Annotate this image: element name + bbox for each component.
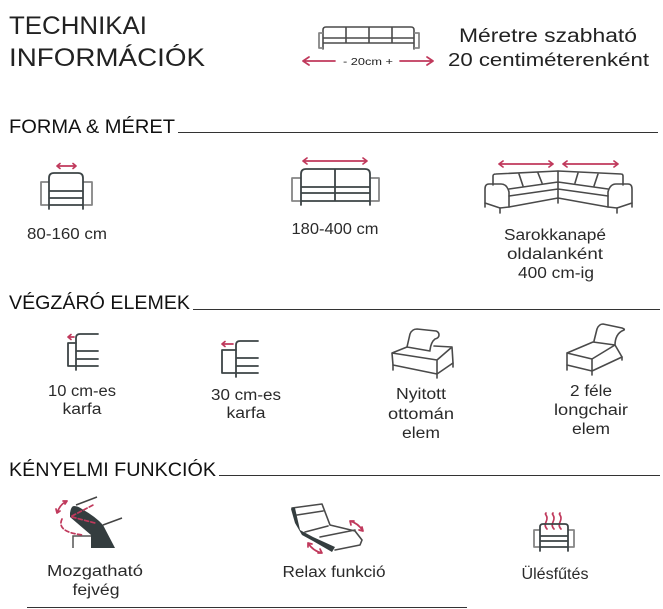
label: longchair: longchair — [554, 402, 628, 419]
title: TECHNIKAI — [9, 12, 147, 40]
label: adjustable headrest: Mozgatható — [47, 563, 143, 580]
label: corner sofa: 400 cm-ig — [518, 265, 594, 282]
heading: forma és méret: FORMA & MÉRET — [9, 117, 175, 138]
heading: végzáró elemek: VÉGZÁRÓ ELEMEK — [9, 292, 190, 314]
section: kényelmi funkciók — [9, 459, 660, 599]
heading: kényelmi funkciók: KÉNYELMI FUNKCIÓK — [9, 459, 216, 481]
label: heated seat: Ülésfűtés — [522, 565, 589, 583]
title — [9, 12, 205, 72]
label: longchair — [554, 383, 628, 438]
section: végzáró elemek — [9, 292, 660, 442]
icon: corner sofa — [485, 161, 632, 213]
label: adjustable headrest — [47, 563, 143, 599]
icon: longchair — [567, 324, 624, 375]
text: custom size note — [448, 26, 649, 70]
label: corner sofa: oldalanként — [507, 246, 604, 263]
label: armchair: 80-160 cm — [27, 226, 107, 243]
icon: heated seat — [534, 513, 574, 551]
text: custom size note: 20 centiméterenként — [448, 49, 649, 70]
icon: adjustable headrest — [56, 497, 122, 548]
icon: resizable sofa with 20 cm arrows: - 20cm + — [343, 56, 393, 68]
icon: 30 cm arm — [222, 341, 258, 377]
icon: open ottoman — [392, 329, 453, 378]
label: 30 cm arm: karfa — [226, 405, 266, 422]
label: 30 cm arm — [211, 387, 281, 422]
label: longchair: elem — [572, 421, 610, 438]
label: sofa: 180-400 cm — [292, 221, 378, 238]
label: open ottoman: Nyitott — [396, 386, 447, 403]
icon: armchair — [41, 164, 92, 209]
text: custom size note: Méretre szabható — [459, 26, 637, 47]
label: longchair: 2 féle — [570, 383, 612, 400]
label: 10 cm arm: 10 cm-es — [48, 383, 116, 400]
label: corner sofa — [504, 227, 606, 282]
label: open ottoman: elem — [402, 425, 440, 442]
icon: sofa — [292, 158, 379, 205]
label: relax function: Relax funkció — [282, 564, 386, 581]
icon: 10 cm arm — [68, 334, 98, 370]
icon: relax function — [291, 504, 363, 553]
label: 30 cm arm: 30 cm-es — [211, 387, 281, 404]
label: open ottoman — [388, 386, 454, 442]
label: 10 cm arm — [48, 383, 116, 418]
title: INFORMÁCIÓK — [9, 43, 205, 72]
section: forma és méret — [9, 117, 658, 282]
label: corner sofa: Sarokkanapé — [504, 227, 606, 244]
icon: resizable sofa with 20 cm arrows — [303, 27, 433, 68]
label: open ottoman: ottomán — [388, 406, 454, 423]
label: adjustable headrest: fejvég — [72, 582, 120, 599]
label: 10 cm arm: karfa — [62, 401, 102, 418]
